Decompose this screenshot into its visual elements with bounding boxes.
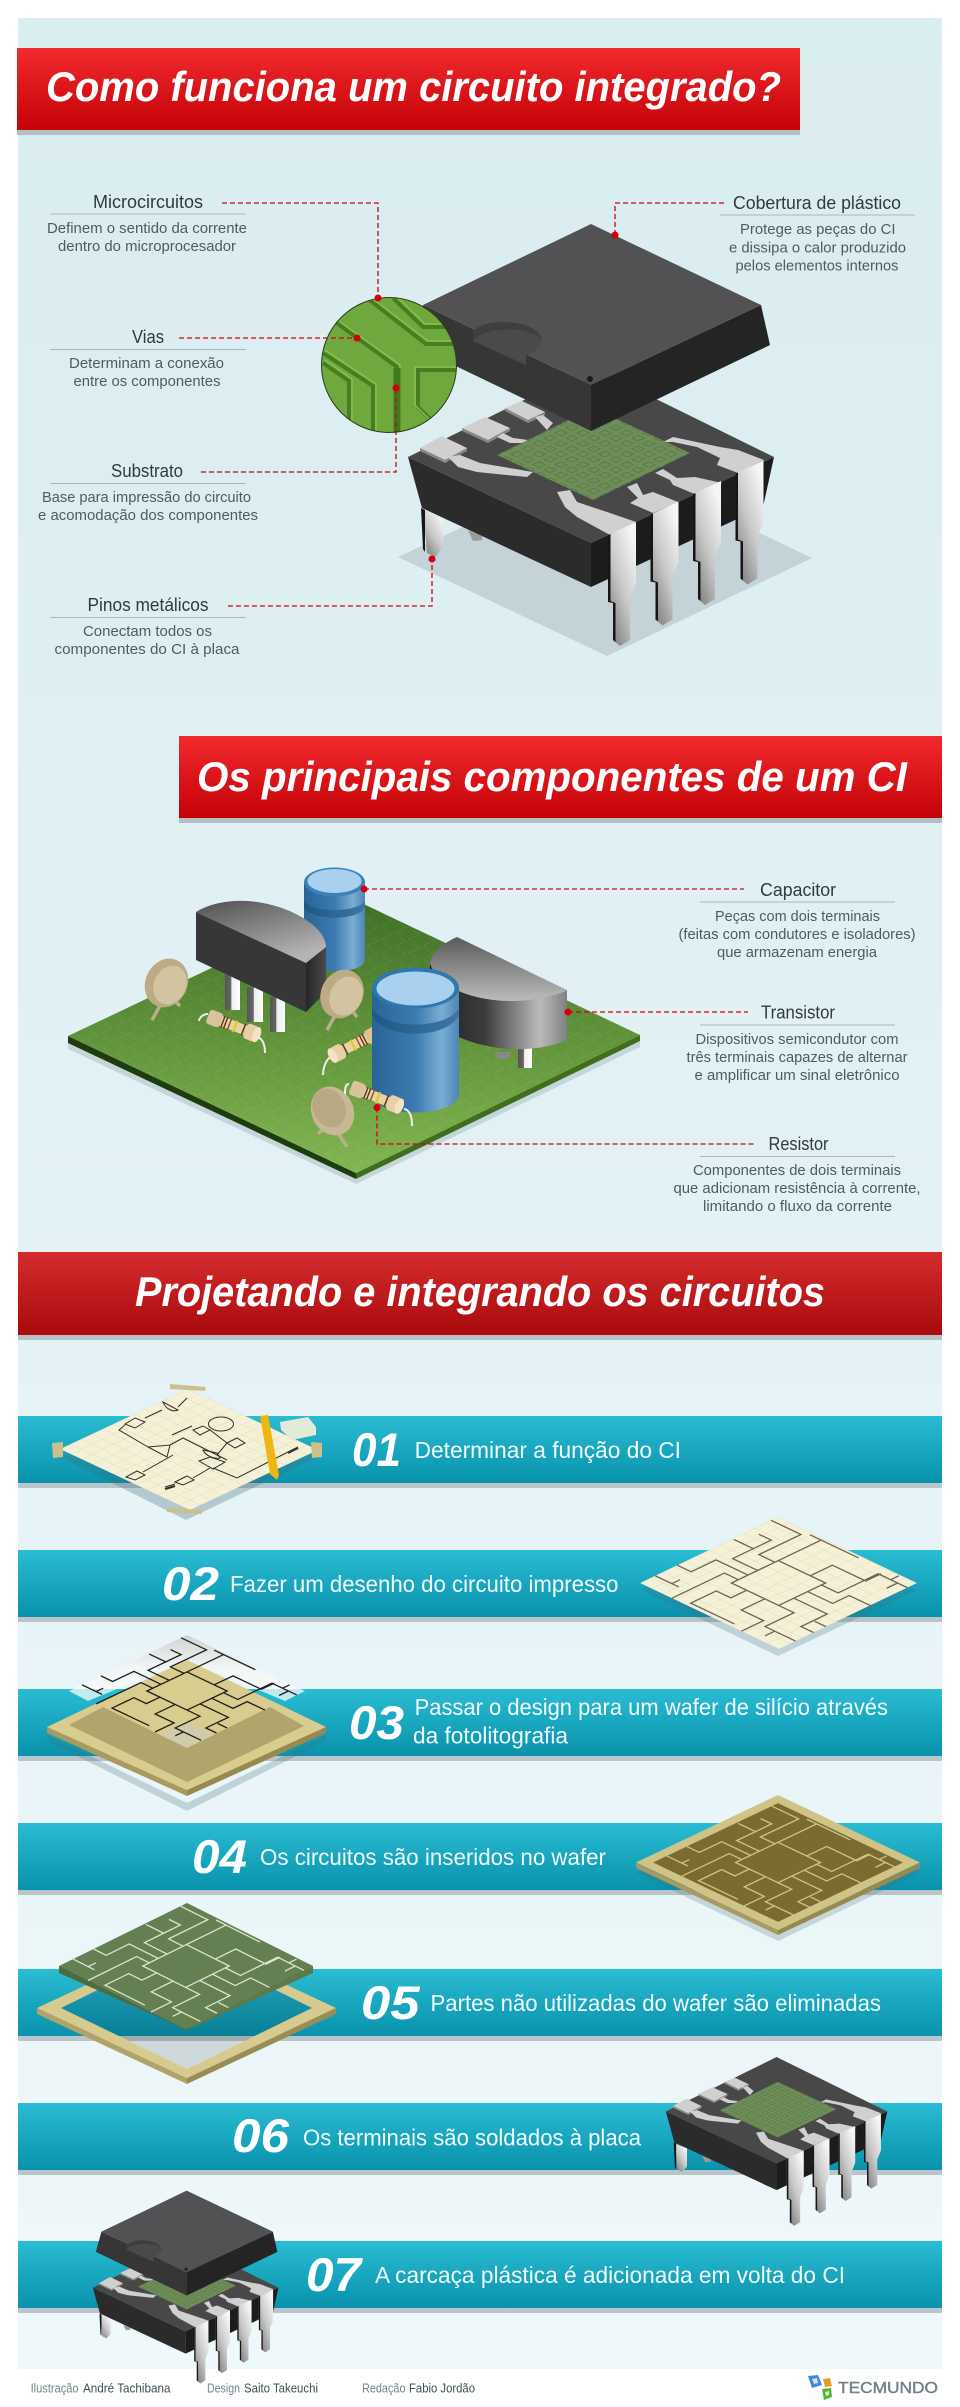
- step 5 number and text: Partes não utilizadas do wafer são eliminadas: [430, 1990, 881, 2016]
- chip shadow: [398, 460, 812, 656]
- callout: Vias: entre os componentes: [74, 374, 220, 390]
- callout: Resistor: [374, 1104, 920, 1215]
- callout: Capacitor: Capacitor: [760, 880, 836, 900]
- step 5 illustration: wafer frame and cut chip: [37, 1903, 336, 2084]
- credits footer: Design: [207, 2381, 240, 2396]
- step 1 number and text: 01: [352, 1423, 401, 1476]
- step 6 number and text: Os terminais são soldados à placa: [303, 2124, 641, 2150]
- eraser: [280, 1417, 316, 1440]
- step 4 number and text: 04: [192, 1830, 247, 1883]
- callout: Resistor: Resistor: [768, 1134, 829, 1154]
- first resistor: [199, 1009, 265, 1053]
- step 7 number and text: A carcaça plástica é adicionada em volta do CI: [375, 2262, 845, 2288]
- callout: Transistor: [564, 1002, 908, 1084]
- credits footer: Ilustração: [31, 2381, 79, 2396]
- magnified circuit circle: [322, 295, 460, 435]
- step 2 number and text: 02: [162, 1557, 219, 1610]
- credits footer: Redação: [362, 2381, 406, 2396]
- step 6 number and text: 06: [232, 2109, 290, 2162]
- step 1 number and text: [352, 1423, 681, 1476]
- step 3 number and text: [349, 1694, 888, 1749]
- right transistor: [430, 937, 567, 1068]
- callout: Transistor: Transistor: [761, 1002, 835, 1022]
- callout: Microcircuitos: Definem o sentido da corrente: [47, 221, 247, 237]
- callout: Capacitor: [360, 880, 916, 961]
- credits footer: Saito Takeuchi: [244, 2381, 318, 2396]
- step 1 number and text: Determinar a função do CI: [415, 1437, 681, 1463]
- callout: Resistor: limitando o fluxo da corrente: [703, 1199, 892, 1215]
- step 2 number and text: [162, 1557, 618, 1610]
- callout: Capacitor: que armazenam energia: [717, 945, 878, 961]
- step 7 number and text: 07: [306, 2248, 363, 2301]
- callout: Substrato: [38, 384, 400, 524]
- heading: Como funciona um circuito integrado?: [17, 48, 800, 135]
- callout: Pinos metálicos: Conectam todos os: [83, 624, 212, 640]
- tape: [52, 1384, 322, 1514]
- step 6 illustration: chip with soldered terminals: [666, 2057, 887, 2226]
- plastic cover: [412, 224, 770, 431]
- heading: Projetando e integrando os circuitos: [18, 1252, 942, 1340]
- board: [68, 900, 640, 1184]
- callout: Resistor: que adicionam resistência à corrente,: [674, 1181, 920, 1197]
- step 4 illustration: wafer with circuits: [636, 1795, 920, 1941]
- step 5 number and text: [361, 1976, 881, 2029]
- callout: Cobertura de plástico: Protege as peças do CI: [740, 222, 896, 238]
- callout: Substrato: e acomodação dos componentes: [38, 508, 258, 524]
- callout: Cobertura de plástico: [612, 193, 915, 274]
- credits footer: André Tachibana: [83, 2381, 171, 2396]
- callout: Transistor: três terminais capazes de alternar: [686, 1050, 908, 1066]
- callout: Transistor: Dispositivos semicondutor com: [696, 1032, 898, 1048]
- step 7 illustration: chip with plastic cover: [93, 2191, 278, 2384]
- step bars: [18, 1416, 942, 2313]
- step 3 number and text: 03: [349, 1696, 404, 1749]
- ceramic disc capacitors: [137, 951, 372, 1147]
- step 5 number and text: 05: [361, 1976, 420, 2029]
- small capacitor: [304, 868, 365, 971]
- second resistor: [323, 1025, 383, 1075]
- callout: Cobertura de plástico: Cobertura de plástico: [733, 193, 901, 213]
- step 2 illustration: circuit drawing: [640, 1517, 917, 1656]
- circuit board illustration: [68, 868, 640, 1184]
- step 4 number and text: Os circuitos são inseridos no wafer: [260, 1844, 606, 1870]
- callout: Microcircuitos: [47, 192, 382, 302]
- callout: Transistor: e amplificar um sinal eletrônico: [694, 1068, 900, 1084]
- callout: Cobertura de plástico: e dissipa o calor produzido: [729, 240, 906, 256]
- callout: Resistor: Componentes de dois terminais: [693, 1163, 901, 1179]
- logo: TecMundo: [808, 2375, 938, 2400]
- logo: TecMundo: TECMUNDO: [838, 2380, 938, 2397]
- step 6 number and text: [232, 2109, 641, 2162]
- heading: Os principais componentes de um CI: Os principais componentes de um CI: [197, 753, 908, 800]
- step 2 number and text: Fazer um desenho do circuito impresso: [230, 1571, 618, 1597]
- callout: Cobertura de plástico: pelos elementos internos: [736, 258, 898, 274]
- step 1 illustration: paper schematic: [52, 1384, 322, 1520]
- step 7 number and text: [306, 2248, 845, 2301]
- callout: Pinos metálicos: Pinos metálicos: [88, 595, 208, 615]
- integrated circuit body with pins: [408, 367, 774, 646]
- front resistor: [345, 1080, 412, 1126]
- callout: Capacitor: Peças com dois terminais: [715, 909, 880, 925]
- credits footer: [31, 2381, 475, 2396]
- callout: Substrato: Base para impressão do circuito: [42, 490, 251, 506]
- callout: Capacitor: (feitas com condutores e isoladores): [678, 927, 916, 943]
- callout: Vias: Vias: [132, 327, 164, 347]
- left transistor: [196, 901, 326, 1032]
- large capacitor: [372, 968, 459, 1112]
- heading: Como funciona um circuito integrado?: Como funciona um circuito integrado?: [46, 63, 781, 110]
- credits footer: Fabio Jordão: [409, 2381, 475, 2396]
- step 3 illustration: photolithography on wafer: [47, 1635, 326, 1811]
- step 3 number and text: da fotolitografia: [413, 1723, 568, 1749]
- heading: Projetando e integrando os circuitos: Projetando e integrando os circuitos: [135, 1268, 825, 1315]
- callout: Microcircuitos: Microcircuitos: [93, 192, 203, 212]
- callout: Microcircuitos: dentro do microprocesador: [58, 239, 236, 255]
- callout: Pinos metálicos: [50, 556, 436, 658]
- pencil: [260, 1415, 279, 1480]
- step 3 number and text: Passar o design para um wafer de silício através: [415, 1694, 888, 1720]
- callout: Vias: [50, 327, 360, 390]
- step 4 number and text: [192, 1830, 606, 1883]
- heading: Os principais componentes de um CI: [179, 736, 942, 823]
- callout: Pinos metálicos: componentes do CI à placa: [54, 642, 240, 658]
- callout: Vias: Determinam a conexão: [69, 356, 224, 372]
- callout: Substrato: Substrato: [111, 461, 183, 481]
